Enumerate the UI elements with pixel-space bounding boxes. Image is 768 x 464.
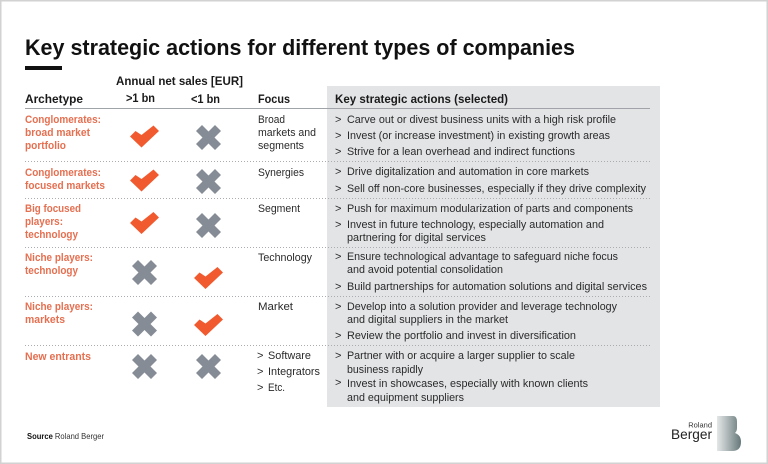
row: niche players markets: > bbox=[335, 301, 341, 313]
row: niche players technology: Niche players: bbox=[25, 252, 93, 264]
row: conglomerates broad market portfolio bbox=[25, 114, 616, 158]
logo: Roland Berger: Roland bbox=[688, 420, 712, 430]
row: new entrants: Etc. bbox=[268, 382, 285, 394]
row: big focused players technology: Big focused bbox=[25, 203, 81, 215]
row: conglomerates broad market portfolio: portfolio bbox=[25, 140, 66, 152]
row: conglomerates focused markets: Sell off non-core businesses, especially if they drive complexity bbox=[347, 183, 646, 195]
row: new entrants: New entrants bbox=[25, 351, 91, 363]
row: conglomerates broad market portfolio: segments bbox=[258, 140, 304, 152]
row: conglomerates broad market portfolio: Broad bbox=[258, 114, 285, 126]
row: conglomerates broad market portfolio: > bbox=[335, 130, 341, 142]
row: niche players markets: and digital suppliers in the market bbox=[347, 314, 508, 326]
row: big focused players technology bbox=[25, 203, 633, 244]
table header: Annual net sales [EUR] bbox=[116, 74, 243, 88]
row: new entrants: Invest in showcases, especially with known clients bbox=[347, 378, 588, 390]
title: Key strategic actions for different types of companies bbox=[25, 35, 575, 60]
row: niche players markets: Develop into a solution provider and leverage technology bbox=[347, 301, 617, 313]
row: niche players technology: Build partnerships for automation solutions and digital services bbox=[347, 281, 647, 293]
row: niche players technology: > bbox=[335, 281, 341, 293]
row: conglomerates broad market portfolio: Invest (or increase investment) in existing growth areas bbox=[347, 130, 610, 142]
row: niche players technology: technology bbox=[25, 265, 79, 277]
row: conglomerates focused markets: Drive digitalization and automation in core markets bbox=[347, 166, 589, 178]
row: new entrants: and equipment suppliers bbox=[347, 392, 464, 404]
row: niche players technology bbox=[25, 251, 647, 293]
table header bbox=[25, 74, 508, 106]
row: new entrants: > bbox=[335, 350, 341, 362]
row: conglomerates broad market portfolio: > bbox=[335, 114, 341, 126]
table header: Archetype bbox=[25, 92, 83, 106]
row: conglomerates focused markets bbox=[25, 166, 646, 195]
row: new entrants: Partner with or acquire a larger supplier to scale bbox=[347, 350, 575, 362]
row: new entrants: > bbox=[257, 366, 263, 378]
title accent rule bbox=[25, 66, 62, 70]
row: big focused players technology: players: bbox=[25, 216, 63, 228]
row: big focused players technology: partnering for digital services bbox=[347, 232, 486, 244]
logo: Roland Berger bbox=[671, 416, 741, 451]
row: big focused players technology: technology bbox=[25, 229, 79, 241]
row: niche players technology: > bbox=[335, 251, 341, 263]
row: conglomerates focused markets: > bbox=[335, 166, 341, 178]
row: new entrants: business rapidly bbox=[347, 364, 423, 376]
table header: <1 bn bbox=[191, 92, 220, 106]
row: conglomerates focused markets: > bbox=[335, 183, 341, 195]
row: big focused players technology: > bbox=[335, 203, 341, 215]
row: conglomerates focused markets: focused markets bbox=[25, 180, 105, 192]
row: conglomerates broad market portfolio: Strive for a lean overhead and indirect functions bbox=[347, 146, 575, 158]
table header: Focus bbox=[258, 92, 290, 106]
row: niche players technology: Ensure technological advantage to safeguard niche focus bbox=[347, 251, 618, 263]
row: conglomerates focused markets: Conglomerates: bbox=[25, 167, 101, 179]
row: niche players markets: > bbox=[335, 330, 341, 342]
row: conglomerates broad market portfolio: markets and bbox=[258, 127, 316, 139]
row: big focused players technology: Segment bbox=[258, 203, 300, 215]
row: niche players markets bbox=[25, 301, 617, 342]
row: niche players markets: Market bbox=[258, 301, 293, 313]
row: conglomerates broad market portfolio: Carve out or divest business units with a high risk profile bbox=[347, 114, 616, 126]
source note: Source Roland Berger bbox=[27, 431, 104, 441]
row: new entrants: Software bbox=[268, 350, 311, 362]
row: new entrants: > bbox=[257, 382, 263, 394]
table header: >1 bn bbox=[126, 91, 155, 105]
row: niche players technology: Technology bbox=[258, 252, 312, 264]
table header: Key strategic actions (selected) bbox=[335, 92, 508, 106]
row: new entrants: > bbox=[257, 350, 263, 362]
row: new entrants: > bbox=[335, 377, 341, 389]
panel: key strategic actions background bbox=[327, 86, 660, 407]
row: conglomerates broad market portfolio: Conglomerates: bbox=[25, 114, 101, 126]
row: conglomerates focused markets: Synergies bbox=[258, 167, 304, 179]
row: new entrants: Integrators bbox=[268, 366, 320, 378]
logo: Roland Berger: Berger bbox=[671, 426, 712, 442]
row: new entrants bbox=[25, 350, 588, 404]
row: niche players technology: and avoid potential consolidation bbox=[347, 264, 503, 276]
row: conglomerates broad market portfolio: > bbox=[335, 146, 341, 158]
row: big focused players technology: Push for maximum modularization of parts and components bbox=[347, 203, 633, 215]
row: niche players markets: Review the portfolio and invest in diversification bbox=[347, 330, 576, 342]
row: conglomerates broad market portfolio: broad market bbox=[25, 127, 90, 139]
row: big focused players technology: > bbox=[335, 219, 341, 231]
row: niche players markets: markets bbox=[25, 314, 65, 326]
row: niche players markets: Niche players: bbox=[25, 301, 93, 313]
row: big focused players technology: Invest in future technology, especially automation and bbox=[347, 219, 604, 231]
